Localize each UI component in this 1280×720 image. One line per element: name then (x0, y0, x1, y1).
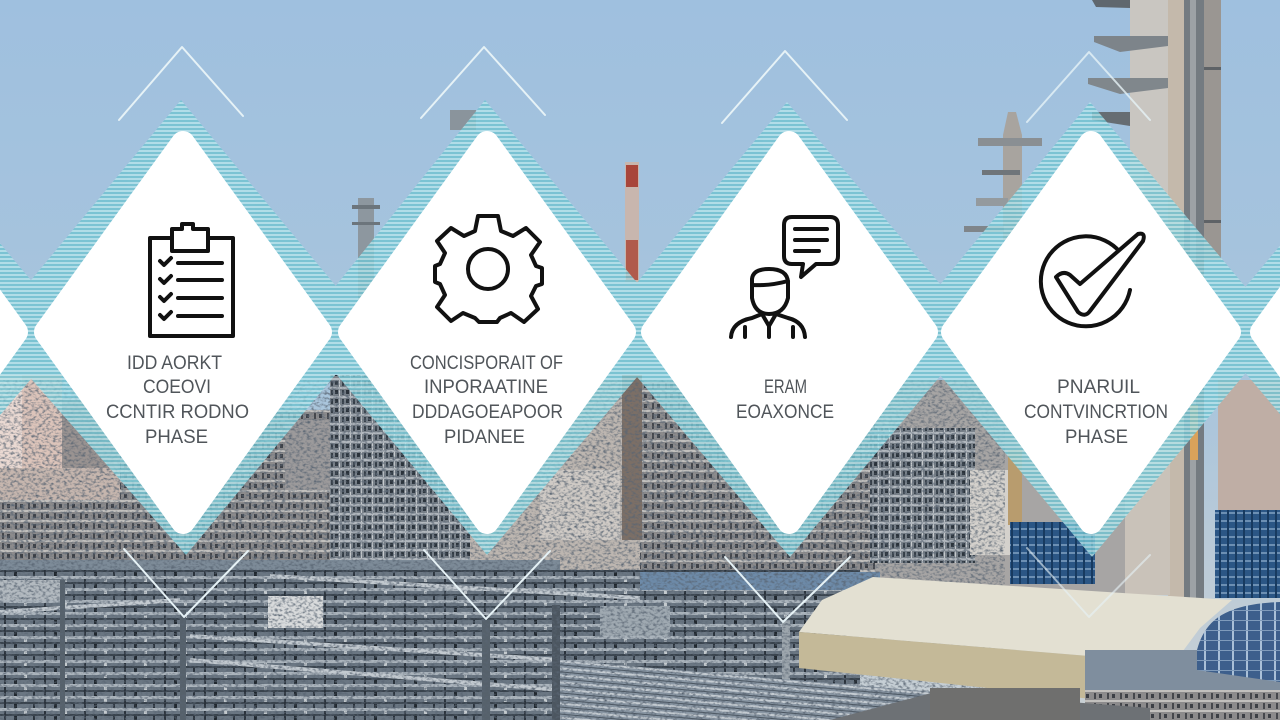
panel: phase 1 (46, 143, 320, 522)
panel: phase 4 (953, 143, 1229, 522)
mid racks left (120, 410, 335, 580)
icon: speech bubble (784, 217, 838, 277)
structural block (870, 428, 975, 563)
secondary tower (964, 112, 1042, 240)
plant backdrop behind right side (875, 380, 1130, 600)
right side buildings (1218, 380, 1280, 510)
icon: check in circle (1041, 234, 1144, 326)
text: phase 2 label: CONCISPORAIT OF (410, 353, 563, 374)
text: phase 3 label: EOAXONCE (736, 402, 834, 423)
chevrons above and below the diamonds (119, 47, 1150, 622)
tall thin tower left of second diamond (352, 198, 380, 308)
text: phase 4 label: PNARUIL (1057, 377, 1140, 398)
text: phase 1 label: CCNTIR RODNO (106, 402, 249, 423)
icon: gear (435, 216, 542, 322)
foreground pipe racks (0, 560, 880, 720)
panel: phase 2 (350, 143, 624, 522)
icon: clipboard checklist (150, 224, 233, 336)
partial diamond: left edge (0, 143, 16, 522)
text: phase 2 label: DDDAGOEAPOOR (412, 402, 563, 423)
flare stack (622, 162, 642, 540)
text: phase 3 label: ERAM (764, 377, 807, 398)
text: phase 2 label (410, 353, 563, 448)
dome roof building (799, 577, 1280, 720)
text: phase 1 label: IDD AORKT (127, 353, 222, 374)
text: phase 1 label (106, 353, 249, 448)
text: phase 1 label: COEOVI (143, 377, 211, 398)
column behind second diamond (450, 110, 476, 130)
panel: phase 3 (653, 143, 926, 522)
blue structure (1010, 522, 1095, 584)
main tower (1088, 0, 1221, 600)
striped cyan diamond frames (0, 100, 1280, 557)
left pale buildings (0, 375, 132, 580)
lower centre roof (830, 688, 1150, 720)
text: phase 4 label (1024, 377, 1168, 448)
text: phase 4 label: PHASE (1065, 427, 1128, 448)
text: phase 3 label (736, 377, 834, 423)
glass dome (1197, 602, 1280, 682)
speckled texture over plant (0, 380, 1005, 720)
foreground roof (560, 660, 935, 720)
text: phase 2 label: INPORAATINE (424, 377, 548, 398)
icon: person (731, 269, 805, 337)
text: phase 1 label: PHASE (145, 427, 208, 448)
partial diamond: right edge (1262, 143, 1280, 522)
text: phase 4 label: CONTVINCRTION (1024, 402, 1168, 423)
text: phase 2 label: PIDANEE (444, 427, 525, 448)
